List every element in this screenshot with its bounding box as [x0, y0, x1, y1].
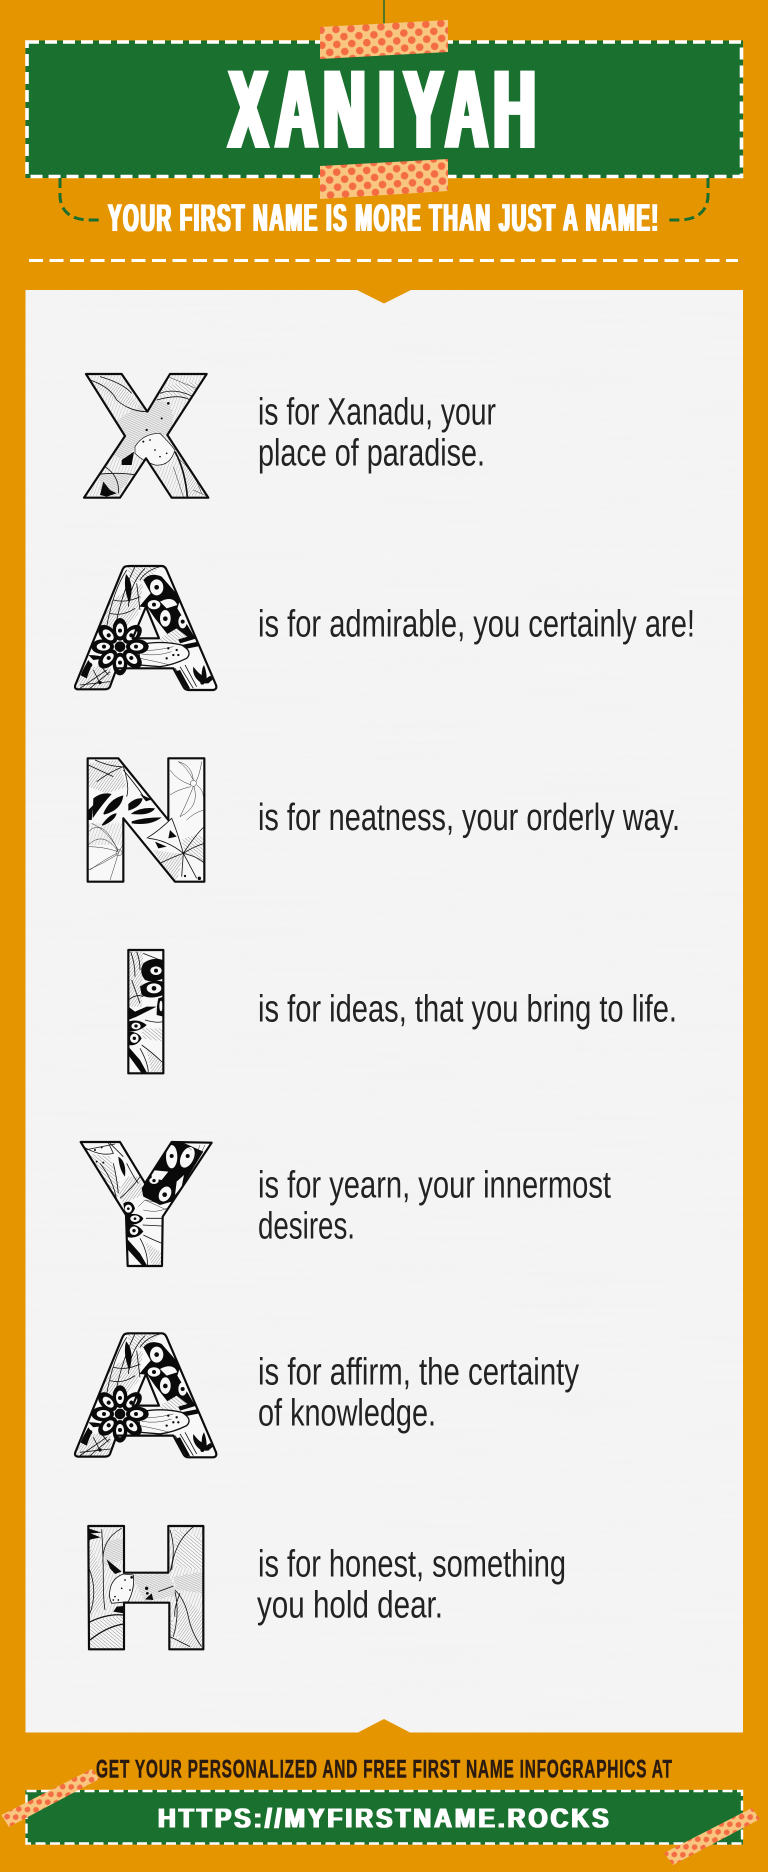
- text: X: is for Xanadu, your: [258, 392, 496, 434]
- icon: letter H: [87, 1523, 205, 1652]
- title: XANIYAH: [229, 46, 536, 172]
- subtitle: YOUR FIRST NAME IS MORE THAN JUST A NAME!: [108, 196, 658, 240]
- text: X: [258, 392, 496, 474]
- icon: letter A second: [75, 1333, 216, 1457]
- text: Y: is for yearn, your innermost: [258, 1164, 611, 1206]
- text: X: place of paradise.: [258, 432, 485, 474]
- tape: bottom of banner: [320, 159, 448, 199]
- icon: letter A: [75, 566, 216, 690]
- row: X: [80, 370, 496, 503]
- icon: letter X: [80, 370, 213, 503]
- right green connector: [668, 178, 708, 220]
- icon: letter Y: [81, 1142, 212, 1266]
- footer prompt: GET YOUR PERSONALIZED AND FREE FIRST NAME INFOGRAPHICS AT: [96, 1756, 672, 1784]
- panel: letter list: [26, 290, 743, 1733]
- row: Y: [81, 1142, 611, 1266]
- top string: [383, 0, 385, 24]
- tape: top: [320, 20, 448, 59]
- row: H: [87, 1523, 566, 1652]
- text: H: you hold dear.: [257, 1584, 443, 1626]
- tape: footer right: [664, 1808, 760, 1865]
- text: A second: of knowledge.: [258, 1392, 436, 1434]
- row: I: [128, 950, 677, 1073]
- text: H: is for honest, something: [258, 1544, 566, 1586]
- row: A: [75, 566, 695, 690]
- row: A second: [75, 1333, 579, 1457]
- header banner: [26, 40, 743, 178]
- left green connector: [60, 178, 103, 220]
- text: H: [257, 1544, 566, 1626]
- footer url: HTTPS://MYFIRSTNAME.ROCKS: [158, 1802, 609, 1834]
- text: Y: [258, 1164, 611, 1248]
- icon: letter N: [88, 758, 204, 882]
- text: A second: is for affirm, the certainty: [258, 1352, 579, 1394]
- text: A second: [258, 1352, 579, 1434]
- tape: footer left: [2, 1769, 99, 1827]
- footer banner: [26, 1790, 743, 1844]
- text: Y: desires.: [258, 1206, 355, 1248]
- icon: letter I: [128, 950, 163, 1073]
- row: N: [88, 758, 680, 882]
